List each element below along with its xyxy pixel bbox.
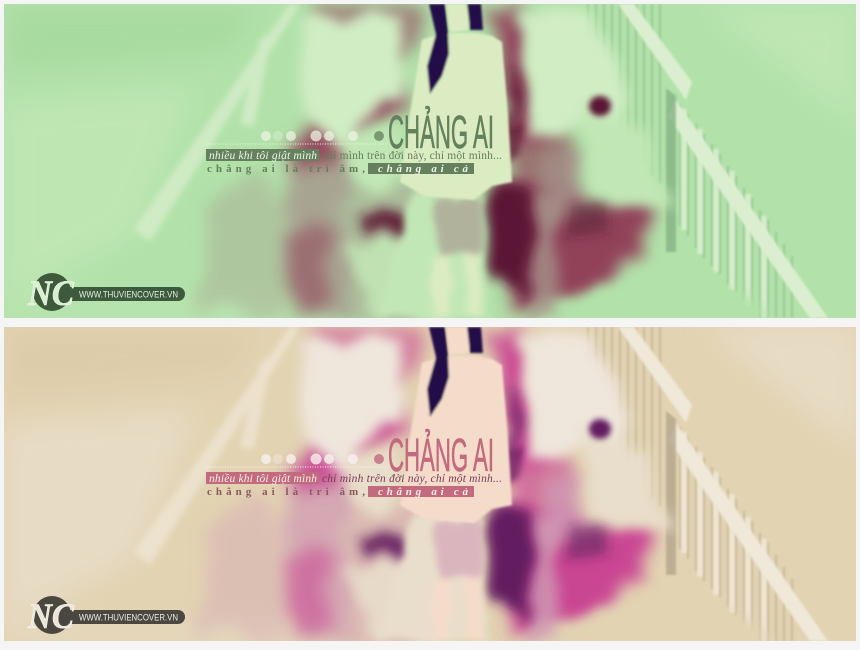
- tagline line two: chẳng ai cả: [378, 486, 468, 498]
- tagline line two: chẳng ai là tri âm,: [207, 486, 365, 498]
- panel: green banner: [4, 4, 856, 318]
- tagline line two: [207, 486, 474, 498]
- tagline line one: [206, 149, 502, 162]
- panel: pink banner: CHẢNG AI: [388, 429, 494, 481]
- tagline line one: [206, 472, 502, 485]
- banner artwork: woman on stairs, pink tone: [4, 327, 856, 641]
- panel: green banner: CHẢNG AI: [388, 106, 494, 158]
- logo badge: [27, 273, 185, 313]
- tagline line two: chẳng ai là tri âm,: [207, 163, 365, 175]
- decorative dots: [261, 454, 384, 464]
- logo badge: NC: [27, 596, 75, 636]
- tagline line one: chỉ mình trên đời này, chỉ một mình...: [322, 150, 502, 162]
- logo badge: NC: [27, 273, 75, 313]
- tagline line two: chẳng ai cả: [378, 163, 468, 175]
- panel: pink banner: [4, 327, 856, 641]
- tagline line one: chỉ mình trên đời này, chỉ một mình...: [322, 473, 502, 485]
- tagline line two: [207, 163, 474, 175]
- banner artwork: woman on stairs, green tone: [4, 4, 856, 318]
- logo badge: [27, 596, 185, 636]
- tagline line one: nhiều khi tôi giật mình: [209, 472, 317, 485]
- logo badge: WWW.THUVIENCOVER.VN: [79, 612, 178, 622]
- logo badge: WWW.THUVIENCOVER.VN: [79, 290, 178, 300]
- decorative dots: [261, 130, 384, 142]
- tagline line one: nhiều khi tôi giật mình: [209, 149, 317, 162]
